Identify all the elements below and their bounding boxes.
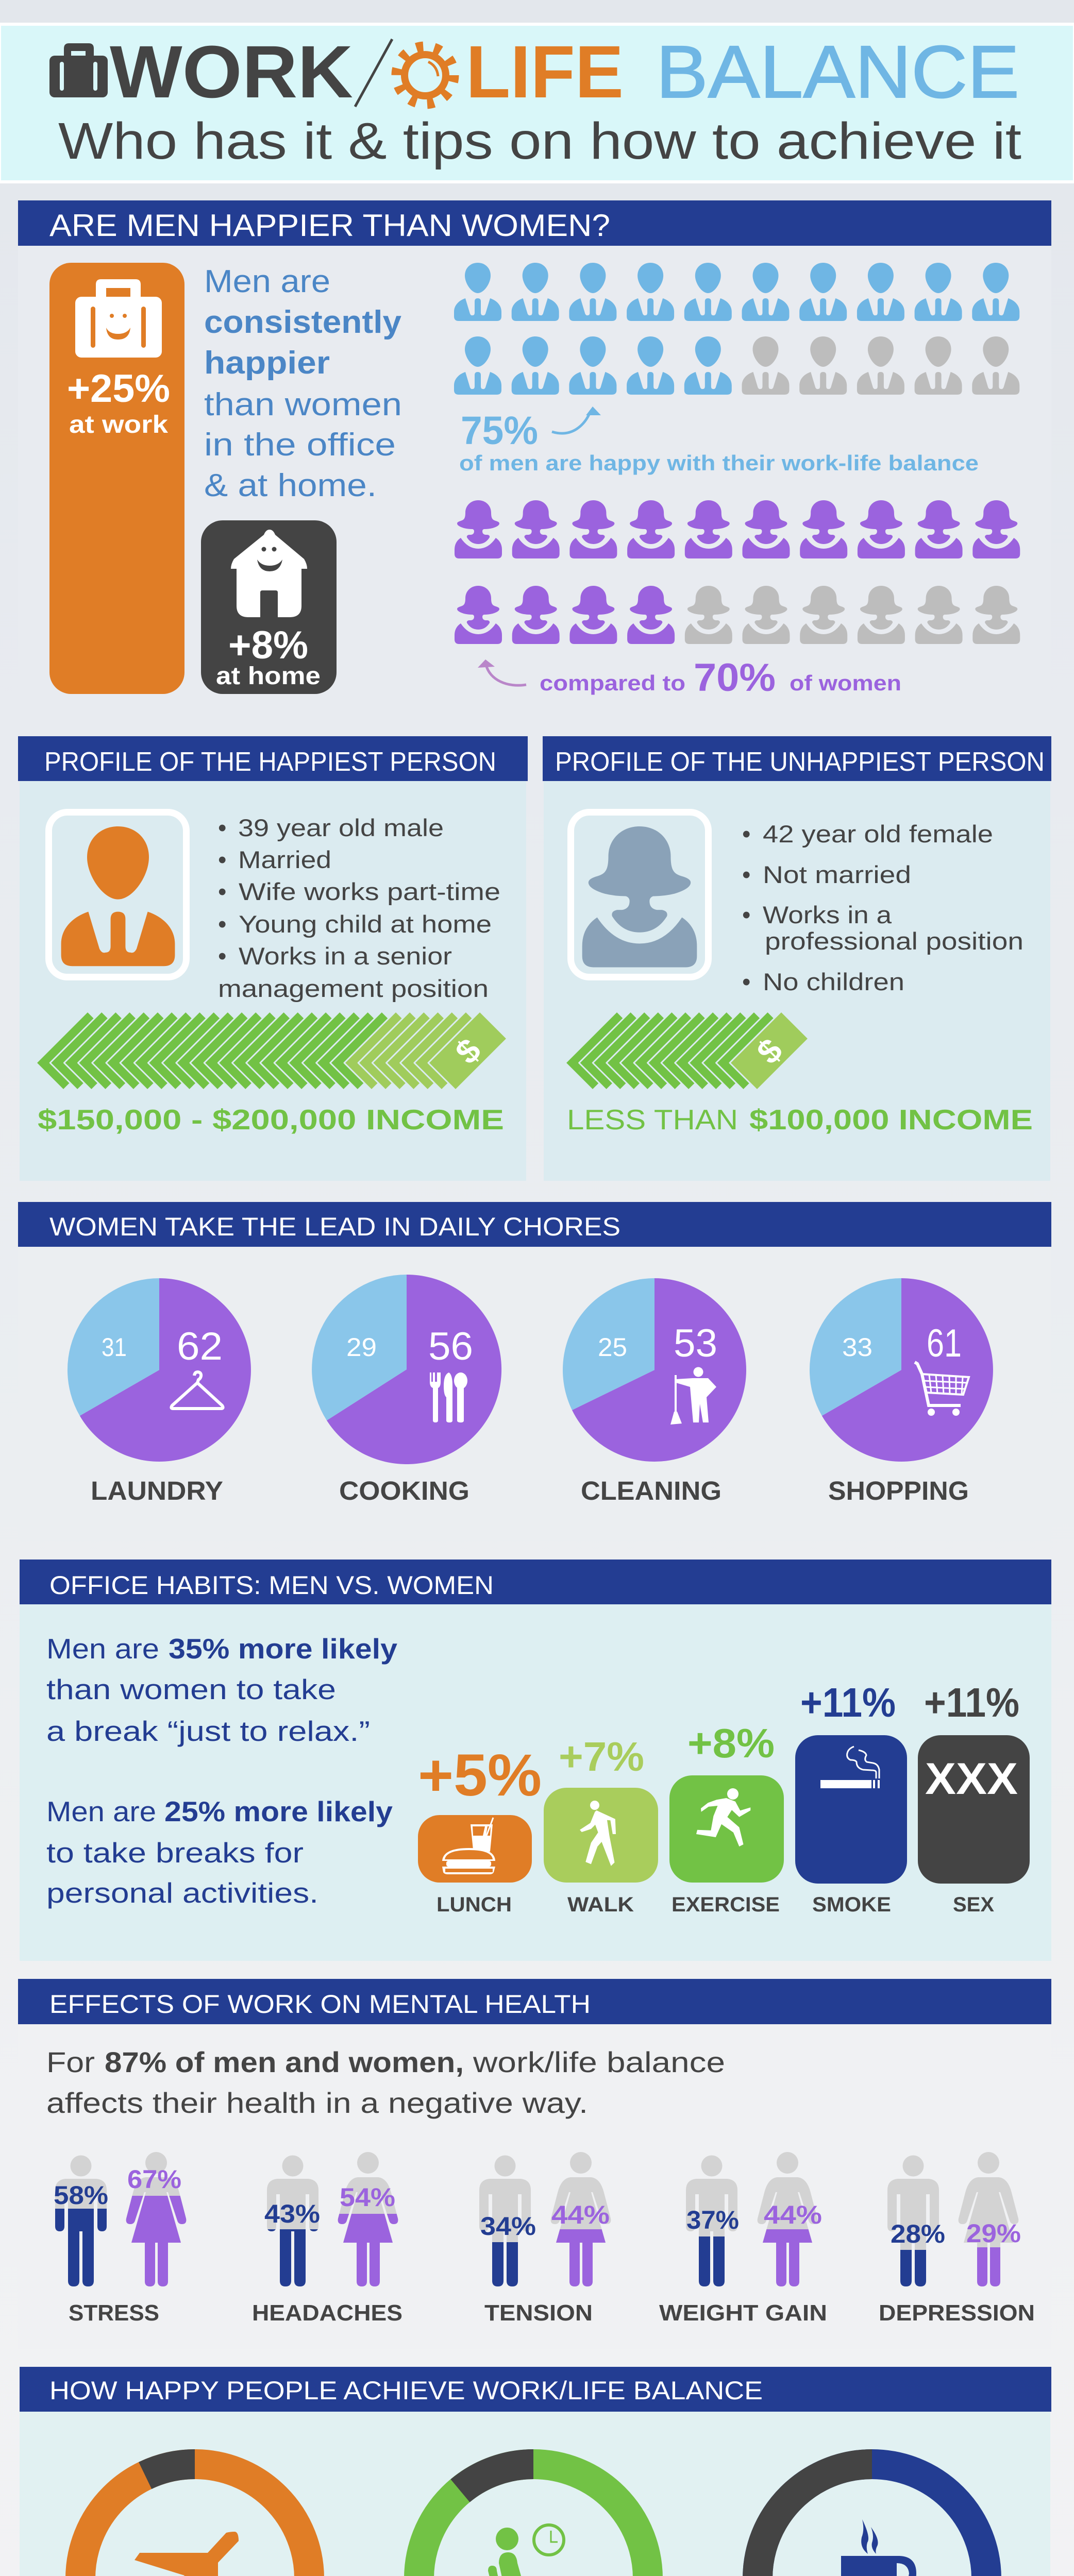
figures: stress: STRESS <box>69 2300 159 2326</box>
statement: men are consistently happier: in the office <box>204 427 396 463</box>
icon: walking person <box>580 1801 616 1866</box>
panel: profile of the unhappiest person <box>543 736 1051 1181</box>
donut: 68% take breaks during the work day <box>754 2464 1011 2576</box>
icon: smiling briefcase <box>75 279 162 358</box>
heading: life: LIFE <box>466 30 624 113</box>
bar: lunch +5%: LUNCH <box>437 1893 512 1916</box>
list: happiest person traits: Works in a senior <box>239 942 452 970</box>
panel: are men happier than women <box>18 200 1051 715</box>
icons: men row 1 <box>454 263 1019 321</box>
bar: walk +7% <box>544 1734 658 1916</box>
slash <box>355 39 392 107</box>
list: unhappiest person traits: No children <box>763 968 904 995</box>
figures: headaches: 54% <box>340 2183 395 2212</box>
statement: men are consistently happier: & at home. <box>204 468 377 503</box>
list: happiest person traits: Young child at home <box>239 910 492 938</box>
list: unhappiest person traits: • <box>742 901 750 928</box>
icon: sun gear clock <box>397 47 453 103</box>
bar: smoke +11% <box>795 1680 907 1916</box>
bar: sex +11% <box>918 1680 1030 1916</box>
list: happiest person traits: 39 year old male <box>238 814 444 841</box>
statement: men are consistently happier: consistently <box>204 304 402 340</box>
figures: headaches: 43% <box>264 2199 320 2228</box>
pie chart: cooking <box>312 1275 501 1505</box>
income: unhappiest: $100,000 INCOME <box>749 1104 1033 1136</box>
pie chart: cleaning: 53 <box>674 1321 717 1365</box>
icon: cigarette <box>820 1747 880 1788</box>
text: 35% more likely <box>46 1633 397 1747</box>
bar: walk +7%: WALK <box>567 1893 634 1916</box>
pie chart: cooking: 56 <box>428 1325 473 1368</box>
section heading: WOMEN TAKE THE LEAD IN DAILY CHORES <box>49 1212 620 1241</box>
figures: tension: 34% <box>480 2212 536 2241</box>
donut: 89% leave work at a reasonable hour <box>411 2464 666 2576</box>
statement: men are consistently happier <box>204 264 402 503</box>
card: +8% at home: +8% <box>228 623 308 667</box>
icons: women row 1 <box>455 500 1020 558</box>
pie chart: cooking: 29 <box>346 1333 377 1362</box>
pie chart: laundry <box>68 1278 251 1505</box>
text: 35% more likely: than women to take <box>46 1673 336 1705</box>
stat: 75% of men: 75% <box>461 409 538 453</box>
figures: depression: 28% <box>891 2219 945 2248</box>
figures: tension: 44% <box>551 2200 610 2229</box>
figures: tension <box>479 2152 611 2326</box>
list: unhappiest person traits: • <box>742 968 750 995</box>
portrait: woman <box>571 812 708 977</box>
pie chart: laundry: LAUNDRY <box>91 1476 223 1505</box>
portrait: man <box>48 812 187 977</box>
bar: sex +11%: SEX <box>953 1893 994 1916</box>
pie chart: cleaning <box>563 1278 746 1505</box>
icon: shopping cart <box>915 1362 969 1416</box>
icon: money stack: $ <box>749 1031 790 1071</box>
figures: weight gain: 37% <box>686 2206 739 2234</box>
list: happiest person traits: • <box>218 942 226 970</box>
stat: compared to 70% of women: of women <box>790 671 901 695</box>
income: unhappiest <box>567 1104 1033 1136</box>
text: 35% more likely: a break “just to relax.” <box>46 1715 370 1747</box>
list: happiest person traits: Wife works part-time <box>239 878 500 905</box>
subtitle: Who has it & tips on how to achieve it <box>58 112 1021 170</box>
figures: depression <box>879 2152 1035 2326</box>
card: +8% at home: at home <box>216 663 321 690</box>
donut: 97% take vacations <box>77 2464 322 2576</box>
pie chart: laundry: 31 <box>102 1333 127 1362</box>
figures: stress: 67% <box>127 2165 181 2194</box>
icon: person sweeping <box>670 1367 716 1425</box>
text: 35% more likely: Men are <box>46 1633 159 1665</box>
bar: smoke +11%: +11% <box>800 1680 896 1725</box>
list: unhappiest person traits: • <box>742 861 750 888</box>
pie chart: cleaning: 25 <box>598 1333 627 1362</box>
statement: 87% of men and women <box>46 2046 725 2119</box>
arrow: men <box>552 406 601 433</box>
pie chart: cleaning: CLEANING <box>581 1476 721 1505</box>
statement: men are consistently happier: happier <box>204 345 330 381</box>
figures: headaches: HEADACHES <box>252 2300 402 2326</box>
heading: work: WORK <box>110 30 353 113</box>
text: 35% more likely: 35% more likely <box>169 1633 397 1665</box>
icon: airplane <box>135 2532 239 2576</box>
statement: men are consistently happier: Men are <box>204 264 330 299</box>
statement: 87% of men and women: 87% of men and women, <box>105 2046 464 2078</box>
section heading: PROFILE OF THE HAPPIEST PERSON <box>44 747 496 777</box>
icon: money stack: $ <box>448 1031 488 1071</box>
income: unhappiest: LESS THAN <box>567 1104 738 1136</box>
list: unhappiest person traits: 42 year old female <box>763 820 993 848</box>
section heading <box>20 1560 1051 1604</box>
figures: weight gain <box>659 2152 827 2326</box>
panel: effects of work on mental health <box>18 1979 1051 2349</box>
panel: women take the lead in daily chores <box>18 1202 1051 1541</box>
text: 25% more likely: 25% more likely <box>164 1795 393 1827</box>
figures: tension: TENSION <box>484 2300 593 2326</box>
section heading: HOW HAPPY PEOPLE ACHIEVE WORK/LIFE BALANCE <box>49 2376 763 2405</box>
list: happiest person traits: • <box>218 846 226 873</box>
bar: smoke +11%: SMOKE <box>812 1893 891 1916</box>
text: 25% more likely <box>46 1795 393 1909</box>
bar: exercise +8%: +8% <box>687 1720 775 1766</box>
list: unhappiest person traits: Not married <box>763 861 911 888</box>
text: 25% more likely: to take breaks for <box>46 1837 304 1869</box>
card: +25% at work: at work <box>69 411 168 438</box>
figures: depression: DEPRESSION <box>879 2300 1035 2326</box>
section heading: EFFECTS OF WORK ON MENTAL HEALTH <box>49 1990 591 2019</box>
stat: compared to 70% of women: 70% <box>694 656 776 700</box>
section heading: OFFICE HABITS: MEN VS. WOMEN <box>49 1571 494 1600</box>
list: happiest person traits: Married <box>238 846 331 873</box>
icon: money stack <box>565 1011 809 1090</box>
bar: walk +7%: +7% <box>559 1734 644 1780</box>
icon: briefcase <box>49 43 108 97</box>
icon: running person <box>696 1788 750 1846</box>
bar: lunch +5%: +5% <box>418 1742 542 1808</box>
bar: sex +11%: +11% <box>924 1680 1019 1725</box>
stat: 75% of men <box>459 409 979 475</box>
card: +25% at work: +25% <box>67 367 170 411</box>
figures: stress <box>54 2152 186 2326</box>
section heading <box>18 1979 1051 2024</box>
statement: men are consistently happier: than women <box>204 387 402 422</box>
icons: women row 2 <box>455 586 1020 644</box>
statement: 87% of men and women: For <box>46 2046 95 2078</box>
title banner <box>0 23 1074 183</box>
income: happiest: $150,000 - $200,000 INCOME <box>38 1104 504 1136</box>
pie chart: laundry: 62 <box>177 1325 223 1368</box>
panel: how happy people achieve balance <box>20 2367 1051 2576</box>
list: happiest person traits <box>218 814 500 1002</box>
arrow: women <box>478 659 526 685</box>
list: unhappiest person traits: professional position <box>765 927 1023 955</box>
section heading: ARE MEN HAPPIER THAN WOMEN? <box>49 208 610 243</box>
bar: exercise +8% <box>669 1720 784 1916</box>
section heading <box>18 1202 1051 1247</box>
section heading <box>20 2367 1051 2412</box>
icon: money stack <box>36 1011 507 1090</box>
card: +8% at home <box>201 520 337 694</box>
panel: office habits <box>20 1560 1051 1961</box>
figures: stress: 58% <box>54 2181 108 2210</box>
heading: balance: BALANCE <box>656 30 1019 113</box>
icon: person sitting with clock <box>488 2525 564 2576</box>
icon: cutlery <box>430 1372 467 1422</box>
figures: weight gain: 44% <box>764 2200 822 2229</box>
list: happiest person traits: • <box>218 814 226 841</box>
section heading <box>543 736 1051 781</box>
text: 25% more likely: Men are <box>46 1795 156 1827</box>
statement: 87% of men and women: affects their health in a negative way. <box>46 2087 588 2119</box>
list: happiest person traits: • <box>218 910 226 938</box>
icon: smiling house <box>231 530 307 617</box>
section heading <box>18 736 528 781</box>
figures: weight gain: WEIGHT GAIN <box>659 2300 827 2326</box>
text: 25% more likely: personal activities. <box>46 1877 318 1909</box>
pie chart: cooking: COOKING <box>339 1476 469 1505</box>
bar: sex +11%: XXX <box>925 1754 1018 1804</box>
bar: exercise +8%: EXERCISE <box>672 1893 780 1916</box>
list: happiest person traits: • <box>218 878 226 905</box>
stat: compared to 70% of women <box>540 656 901 700</box>
section heading: PROFILE OF THE UNHAPPIEST PERSON <box>555 747 1045 777</box>
pie chart: shopping: 33 <box>842 1333 872 1362</box>
icon: burger and drink <box>442 1818 495 1874</box>
list: happiest person traits: management position <box>218 975 489 1002</box>
pie chart: shopping: 61 <box>927 1321 962 1365</box>
pie chart: shopping: SHOPPING <box>828 1476 969 1505</box>
list: unhappiest person traits: • <box>742 820 750 848</box>
section heading <box>18 200 1051 246</box>
bar: lunch +5% <box>418 1742 542 1916</box>
stat: 75% of men: of men are happy with their work-life balance <box>459 451 979 475</box>
statement: 87% of men and women: work/life balance <box>473 2046 725 2078</box>
pie chart: shopping <box>810 1278 993 1505</box>
list: unhappiest person traits <box>742 820 1023 995</box>
icon: coffee cup <box>826 2519 916 2576</box>
icon: hanger <box>171 1372 223 1409</box>
figures: headaches <box>252 2152 402 2326</box>
figures: depression: 29% <box>966 2219 1021 2248</box>
icons: men row 2 <box>454 336 1019 395</box>
panel: profile of the happiest person <box>18 736 528 1181</box>
card: +25% at work <box>49 263 184 694</box>
stat: compared to 70% of women: compared to <box>540 671 685 695</box>
list: unhappiest person traits: Works in a <box>763 901 892 928</box>
